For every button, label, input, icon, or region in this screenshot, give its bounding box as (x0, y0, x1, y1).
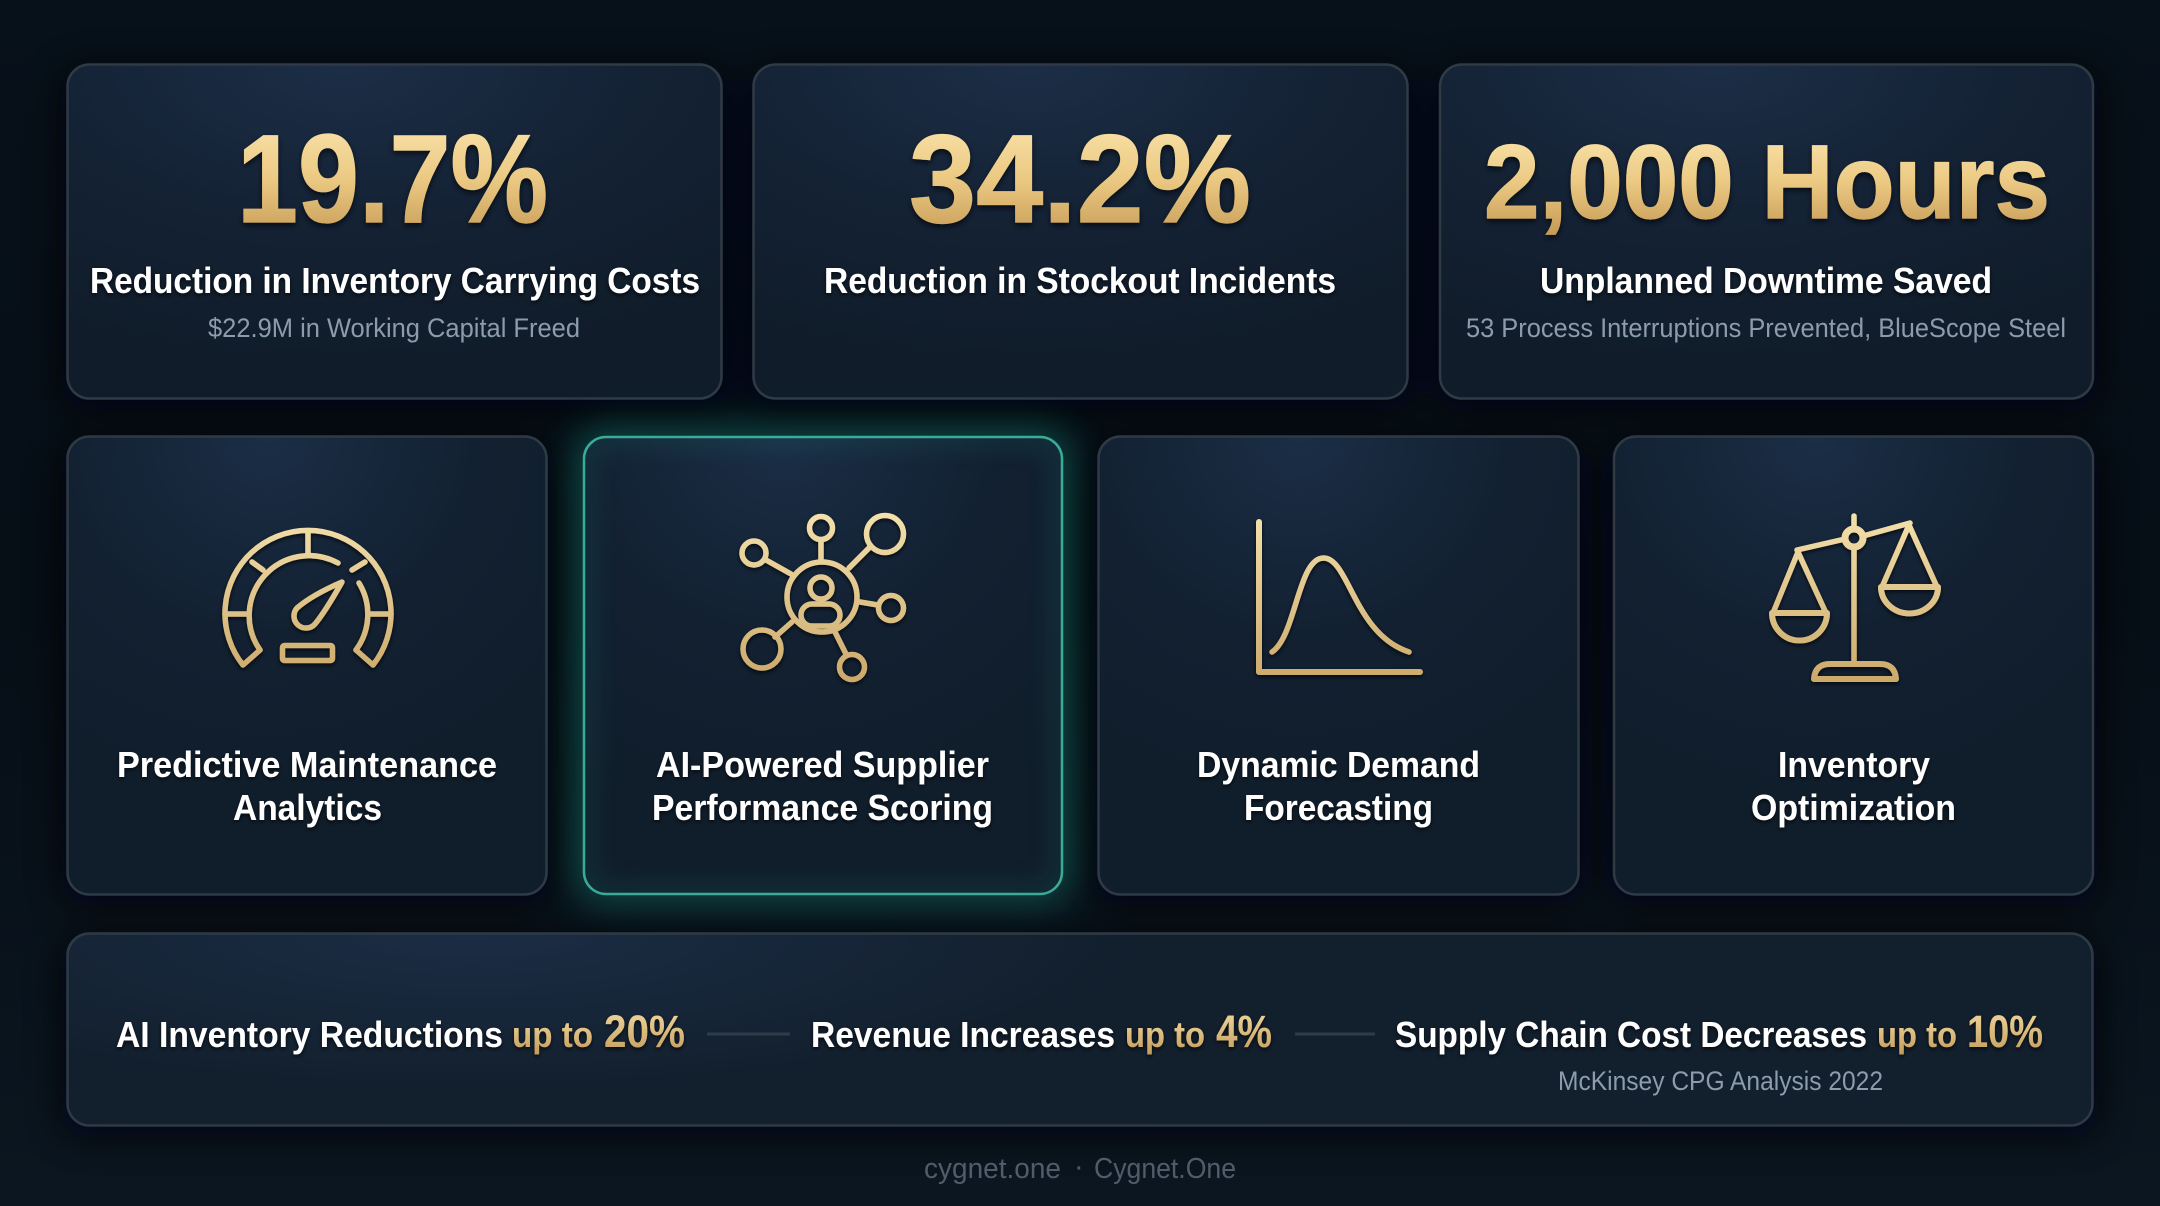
panel: bottom summary bar (68, 934, 2092, 1126)
metric: supply chain cost decreases: up to (1877, 1014, 1957, 1055)
footer: Cygnet.One (1094, 1153, 1236, 1185)
stat label: unplanned downtime: Unplanned Downtime Saved (1540, 260, 1992, 301)
metric: AI inventory reductions: up to (512, 1014, 593, 1055)
metric: revenue increases: up to (1125, 1014, 1205, 1055)
metric: AI inventory reductions: 20% (604, 1006, 685, 1057)
card label (1197, 744, 1480, 828)
card label (652, 744, 993, 828)
card label (117, 744, 497, 828)
icon: demand curve (1259, 522, 1420, 672)
card label: Optimization (1751, 787, 1956, 828)
card label: Inventory (1778, 744, 1930, 785)
stat number: 19.7%: 19.7% (237, 110, 548, 249)
card label: Performance Scoring (652, 787, 993, 828)
source note: McKinsey CPG Analysis 2022 (1558, 1066, 1883, 1096)
footer (924, 1151, 1236, 1185)
card label: Predictive Maintenance (117, 744, 497, 785)
icon: supplier network (742, 516, 904, 680)
panel: stat 2,000 hours (1440, 64, 2093, 398)
panel: inventory optimization (1614, 436, 2093, 894)
footer: cygnet.one (924, 1153, 1061, 1185)
stat note: BlueScope Steel: 53 Process Interruptions Prevented, BlueScope Steel (1466, 313, 2066, 343)
panel: stat 19.7% (68, 64, 722, 398)
stat note: working capital: $22.9M in Working Capital Freed (208, 313, 580, 343)
panel: predictive maintenance (68, 436, 546, 894)
stat number: 2,000 Hours: 2,000 Hours (1484, 124, 2050, 241)
metric: revenue increases (811, 1006, 1272, 1057)
card label: Dynamic Demand (1197, 744, 1480, 785)
metric: revenue increases: 4% (1216, 1006, 1272, 1057)
card label: Forecasting (1244, 787, 1433, 828)
card label (1751, 744, 1956, 828)
stat label: stockout incidents: Reduction in Stockout Incidents (824, 260, 1336, 301)
card label: Analytics (233, 787, 382, 828)
icon: gauge (225, 530, 391, 665)
metric: revenue increases: Revenue Increases (811, 1014, 1115, 1055)
panel: demand forecasting (1098, 436, 1578, 894)
footer: · (1074, 1151, 1084, 1183)
panel: stat 34.2% (754, 64, 1408, 398)
card label: AI-Powered Supplier (656, 744, 989, 785)
metric: AI inventory reductions: AI Inventory Reductions (116, 1014, 503, 1055)
icon: balance scale (1772, 516, 1938, 679)
panel: supplier scoring (highlighted) (575, 428, 1071, 903)
stat number: 34.2%: 34.2% (909, 110, 1251, 249)
metric: supply chain cost decreases: Supply Chain Cost Decreases (1395, 1014, 1867, 1055)
metric: AI inventory reductions (116, 1006, 685, 1057)
metric: supply chain cost decreases: 10% (1967, 1006, 2043, 1057)
metric: supply chain cost decreases (1395, 1006, 2043, 1057)
stat label: inventory carrying costs: Reduction in Inventory Carrying Costs (90, 260, 700, 301)
